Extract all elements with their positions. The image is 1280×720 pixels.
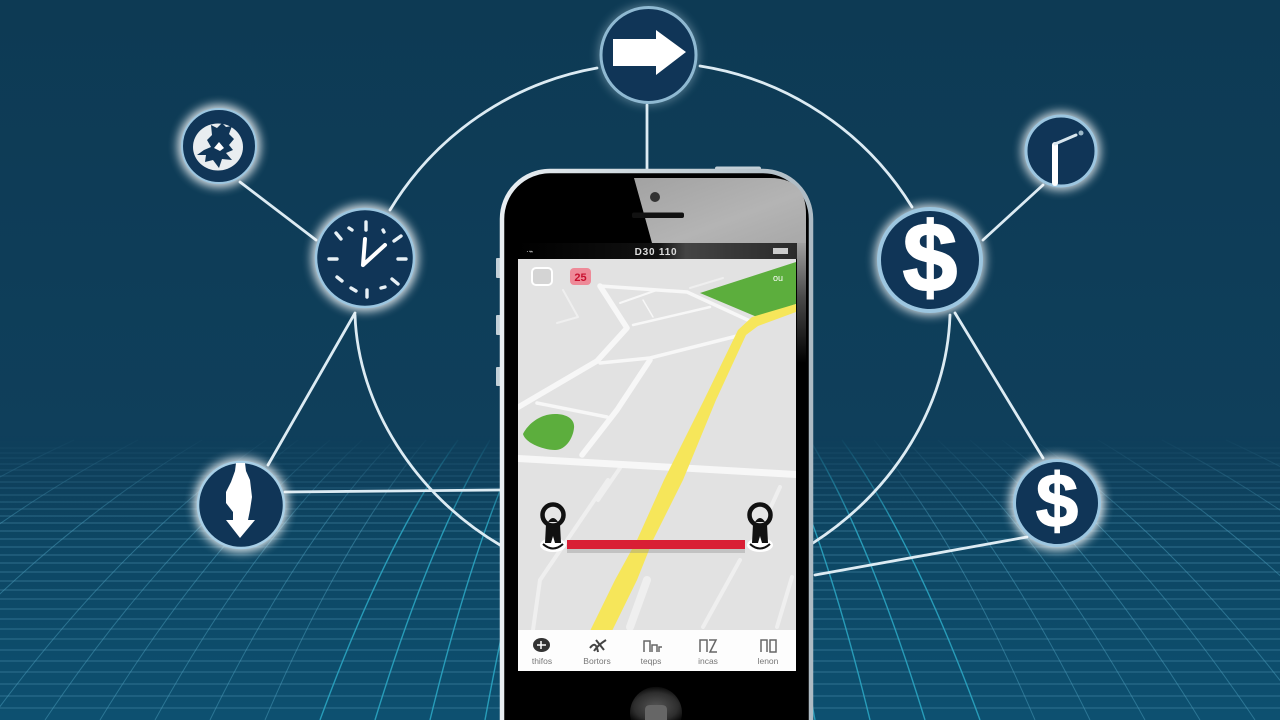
tab icon: five xyxy=(761,640,776,652)
map screen xyxy=(510,259,805,631)
tab labels: teqps xyxy=(641,656,661,666)
tab bar xyxy=(518,630,796,671)
side buttons xyxy=(496,166,761,386)
right edge shade xyxy=(797,243,806,363)
white roads xyxy=(510,286,805,475)
perspective grid floor xyxy=(0,436,1280,720)
node: down figure xyxy=(194,458,288,552)
icon: dollar sign: $ xyxy=(903,202,957,312)
minor roads xyxy=(533,278,792,630)
pin: start xyxy=(540,504,566,552)
speaker xyxy=(632,212,684,218)
status bar xyxy=(518,243,797,259)
node: arrow xyxy=(598,5,698,105)
tab labels xyxy=(532,656,779,666)
yellow route xyxy=(590,304,796,631)
connector lines xyxy=(240,66,1043,575)
icon: clock ticks and hands xyxy=(329,222,406,297)
status bar: D30 110 xyxy=(635,247,677,258)
tab icon: two xyxy=(590,640,606,652)
pin: end xyxy=(747,504,773,552)
tab labels: Bortors xyxy=(583,656,611,666)
icon: figure with down arrow xyxy=(226,463,255,538)
map button: red xyxy=(570,268,591,285)
phone xyxy=(496,166,811,720)
green park xyxy=(700,262,796,317)
tab labels: thifos xyxy=(532,656,552,666)
status bar: ·⌁ xyxy=(526,247,534,256)
icon: bent line xyxy=(1055,130,1084,183)
icon: dollar sign: $ xyxy=(1036,459,1078,544)
tab icon: four xyxy=(700,640,717,652)
icon: splash disc xyxy=(193,123,243,170)
tab icon: three xyxy=(644,641,662,652)
green blob xyxy=(523,414,574,450)
tab labels: lenon xyxy=(758,656,779,666)
map button: red: 25 xyxy=(574,272,587,284)
home button xyxy=(630,687,682,720)
route: red line xyxy=(567,540,745,553)
icon: right arrow xyxy=(613,30,686,75)
map button: square xyxy=(532,268,552,285)
tab labels: incas xyxy=(698,656,718,666)
phone body xyxy=(502,171,811,720)
node: clock xyxy=(312,205,418,311)
camera xyxy=(650,192,660,202)
tiny label on park: ou xyxy=(773,273,783,283)
node: small dollar xyxy=(1010,456,1104,550)
tab icon: one xyxy=(533,638,550,652)
node: large dollar xyxy=(875,202,985,315)
node: corner line xyxy=(1022,112,1100,190)
glass reflection xyxy=(634,178,806,243)
node: badge xyxy=(178,105,260,187)
